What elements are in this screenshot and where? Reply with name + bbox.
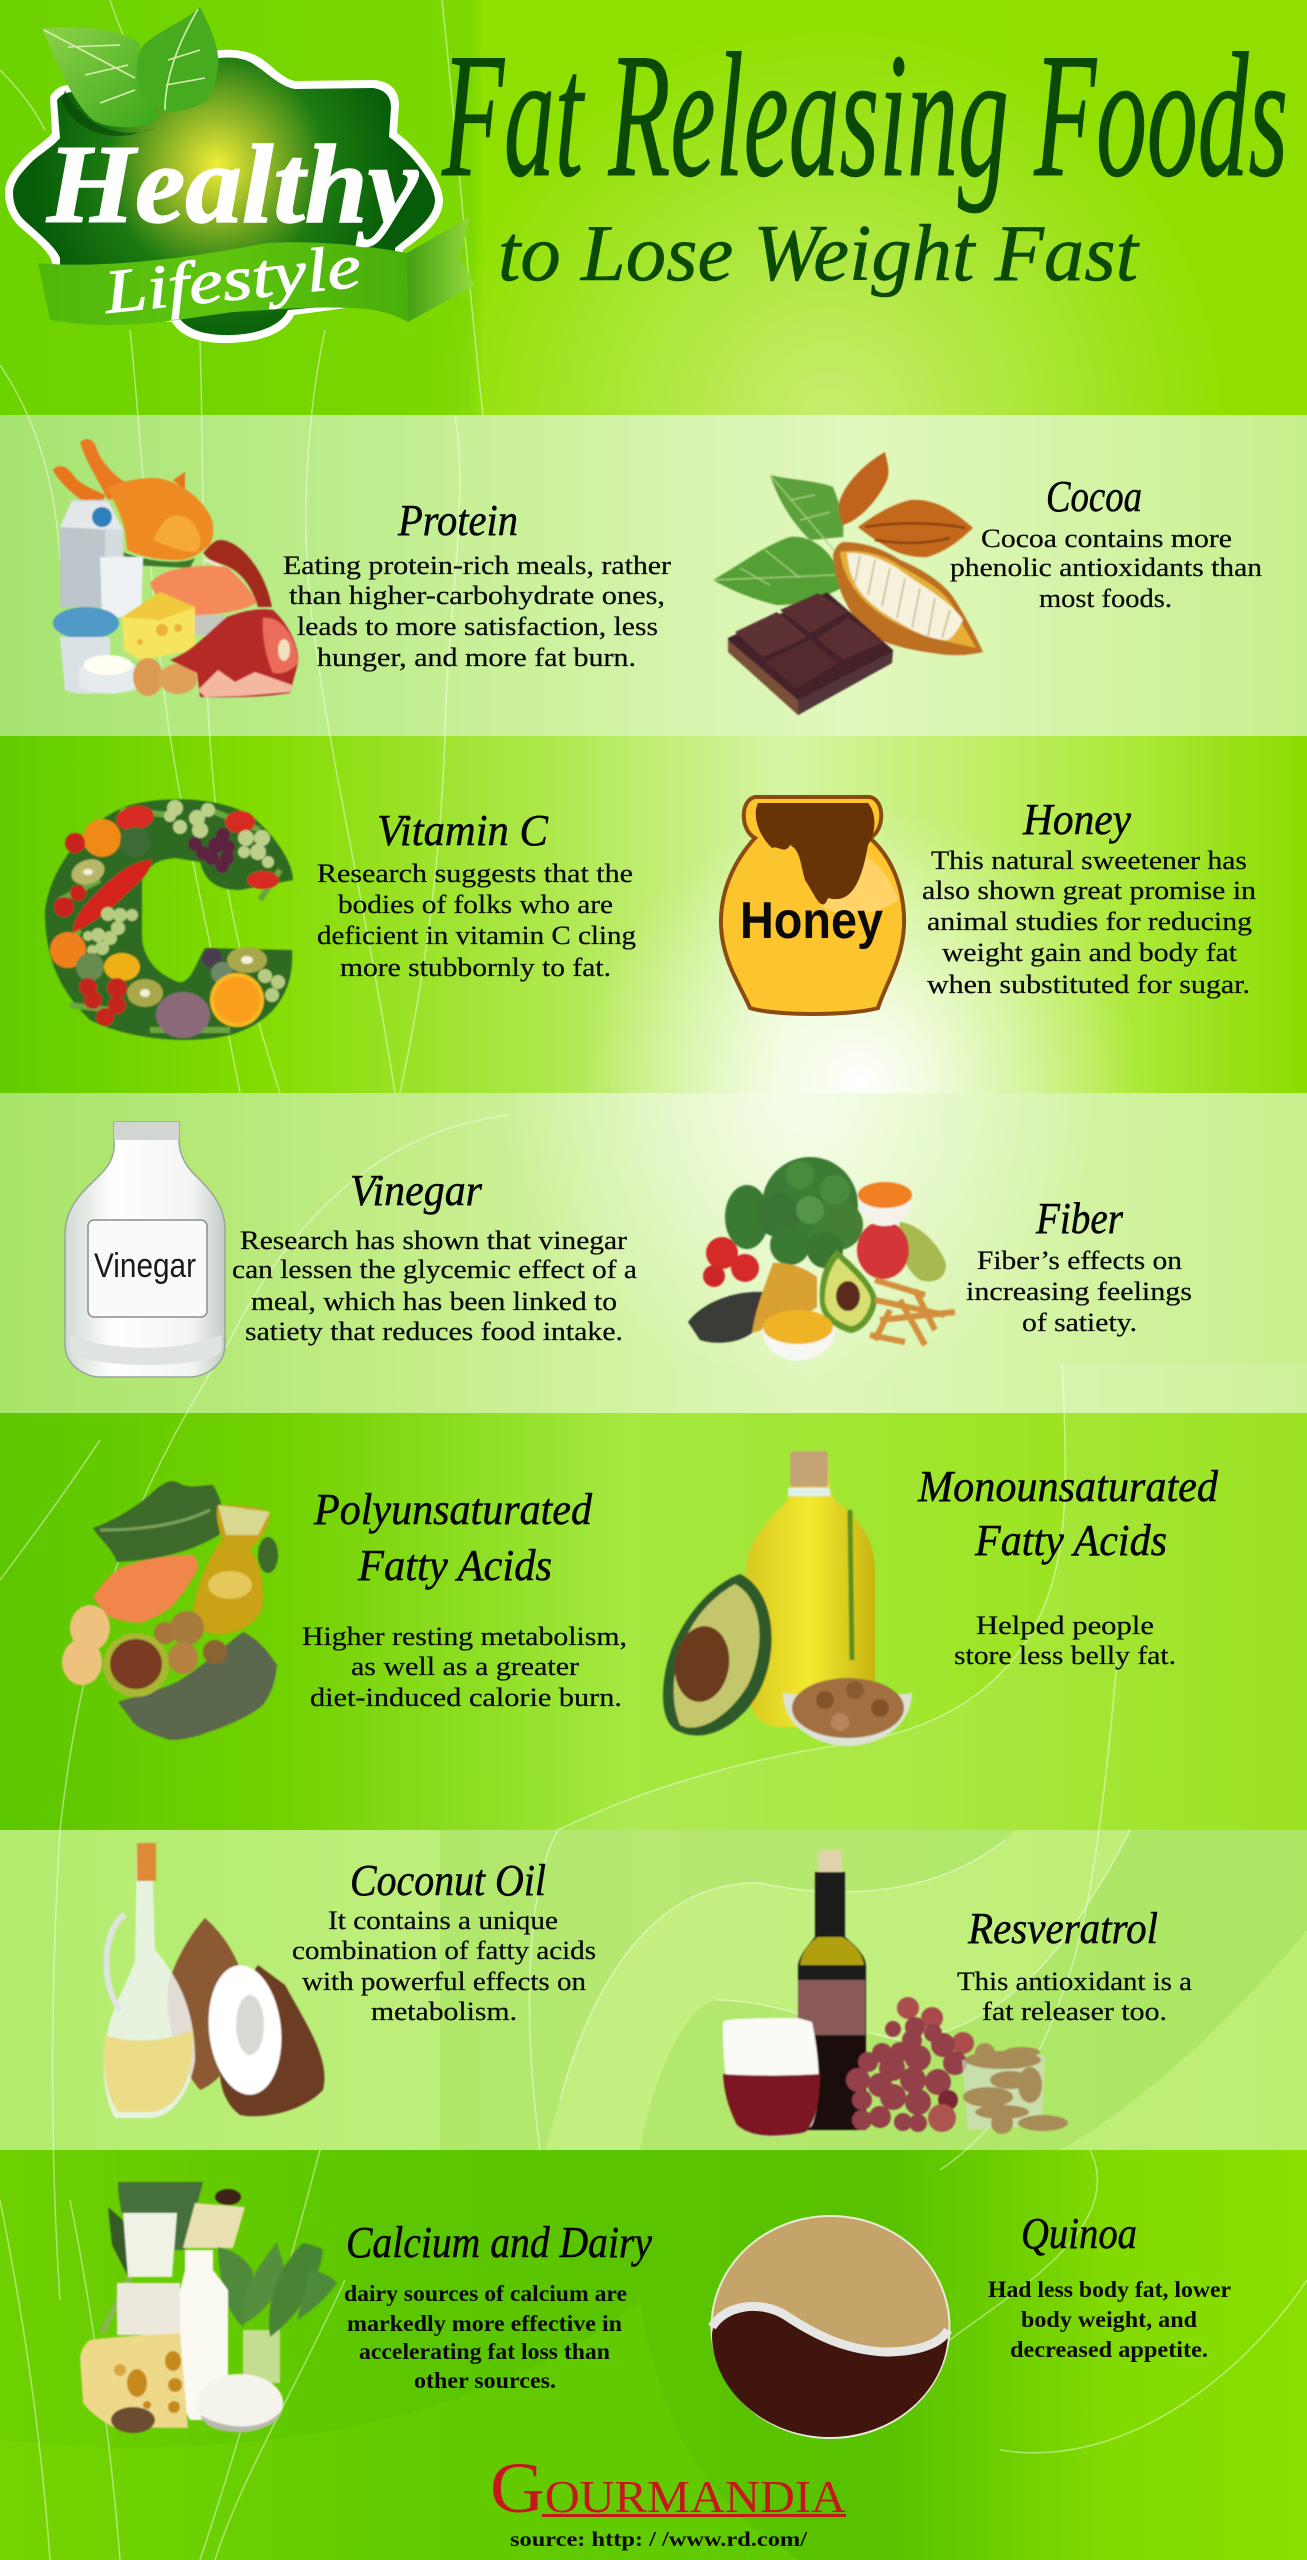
icon: oil bottle and coconut — [104, 1843, 324, 2118]
text block: Fiber’s effects on — [977, 1246, 1182, 1275]
icon: protein foods — [53, 439, 298, 697]
background light swoosh fills — [0, 1364, 1307, 2560]
text block: hunger, and more fat burn. — [317, 643, 636, 672]
text block — [283, 551, 671, 672]
text block — [292, 1906, 596, 2026]
background band 3 — [0, 1093, 1307, 1413]
text block: Research suggests that the — [317, 859, 633, 888]
text block — [954, 1611, 1176, 1670]
brand word: Healthy — [46, 123, 419, 247]
text block: This antioxidant is a — [957, 1967, 1192, 1996]
text block: weight gain and body fat — [942, 938, 1238, 967]
text block — [232, 1226, 638, 1346]
text block: leads to more satisfaction, less — [297, 612, 658, 641]
heading: Quinoa — [1021, 2209, 1137, 2258]
heading: Cocoa — [1046, 472, 1142, 521]
heading line two: Fatty Acids — [357, 1541, 552, 1590]
background band 5 — [0, 1830, 1307, 2150]
footer logo: Gourmandia: GOURMANDIA — [490, 2448, 846, 2528]
icon: quinoa circle — [710, 2215, 950, 2439]
text block: accelerating fat loss than — [359, 2339, 610, 2364]
text block — [922, 846, 1256, 999]
text block: diet-induced calorie burn. — [310, 1683, 622, 1712]
text block: Higher resting metabolism, — [302, 1622, 627, 1651]
icon: cocoa pods and chocolate — [713, 452, 983, 715]
text block: with powerful effects on — [302, 1967, 586, 1996]
background band 4 — [0, 1413, 1307, 1830]
left leaf — [42, 27, 160, 127]
heading: Protein — [397, 496, 518, 545]
heading: Calcium and Dairy — [346, 2218, 652, 2267]
greens texture — [55, 810, 280, 1030]
text block — [302, 1622, 627, 1712]
text block — [966, 1246, 1192, 1337]
title — [441, 16, 1288, 298]
text block: dairy sources of calcium are — [344, 2281, 627, 2306]
text block: bodies of folks who are — [338, 890, 613, 919]
panel: fiber — [688, 1157, 1192, 1361]
text block: Cocoa contains more — [981, 524, 1232, 553]
panel: calcium and dairy — [80, 2182, 652, 2433]
heading: Honey — [1022, 795, 1131, 844]
panel: monounsaturated fatty acids — [663, 1451, 1219, 1746]
heading: Vinegar — [350, 1166, 483, 1215]
leaf shadow — [62, 90, 155, 136]
text block — [957, 1967, 1192, 2026]
badge blob — [5, 50, 443, 343]
icon: honey jar: Honey — [740, 892, 883, 950]
heading: Coconut Oil — [350, 1856, 546, 1905]
brand subword: Lifestyle — [100, 232, 364, 327]
icon: fiber foods — [688, 1157, 955, 1361]
text block: satiety that reduces food intake. — [245, 1317, 623, 1346]
ribbon tail — [405, 217, 475, 322]
text block: combination of fatty acids — [292, 1936, 596, 1965]
text block: Had less body fat, lower — [988, 2277, 1231, 2302]
text block — [317, 859, 636, 982]
icon: wine, grapes and peanuts — [723, 1850, 1068, 2136]
text block: animal studies for reducing — [927, 907, 1252, 936]
text block: most foods. — [1039, 584, 1172, 613]
text block: can lessen the glycemic effect of a — [232, 1255, 638, 1284]
heading: Resveratrol — [967, 1904, 1158, 1953]
icon: dairy foods and greens — [80, 2182, 337, 2433]
panel: polyunsaturated fatty acids — [62, 1481, 627, 1740]
text block: also shown great promise in — [922, 876, 1256, 905]
background header band — [0, 0, 1307, 415]
text block: as well as a greater — [351, 1652, 579, 1681]
text block: body weight, and — [1021, 2307, 1197, 2332]
logo: Healthy Lifestyle badge — [5, 7, 475, 343]
text block: more stubbornly to fat. — [340, 953, 611, 982]
text block: other sources. — [414, 2368, 556, 2393]
icon: vinegar bottle: Vinegar — [94, 1247, 196, 1285]
icon: honey jar — [721, 797, 904, 1014]
text block: increasing feelings — [966, 1277, 1192, 1306]
heading: Vitamin C — [377, 806, 549, 855]
text block: Eating protein-rich meals, rather — [283, 551, 671, 580]
text block: than higher-carbohydrate ones, — [289, 581, 665, 610]
panel: coconut oil — [104, 1843, 596, 2118]
text block: Helped people — [976, 1611, 1154, 1640]
icon: omega-3 foods — [62, 1481, 278, 1740]
source line: source: http: / /www.rd.com/ — [510, 2527, 808, 2551]
heading: Monounsaturated — [917, 1462, 1219, 1511]
icon: letter C of fruit and vegetables — [45, 799, 293, 1040]
text block: when substituted for sugar. — [927, 970, 1250, 999]
panel: vinegar — [65, 1122, 638, 1377]
heading: Polyunsaturated — [313, 1485, 593, 1534]
text block: deficient in vitamin C cling — [317, 921, 636, 950]
text block: meal, which has been linked to — [251, 1287, 617, 1316]
panel: protein — [53, 439, 671, 697]
text block: store less belly fat. — [954, 1641, 1176, 1670]
background band 1 — [0, 415, 1307, 736]
heading line two: Fatty Acids — [974, 1516, 1167, 1565]
panel: resveratrol — [723, 1850, 1192, 2136]
title: to Lose Weight Fast — [498, 210, 1140, 298]
text block: This natural sweetener has — [931, 846, 1247, 875]
panel: honey — [721, 795, 1256, 1014]
text block: phenolic antioxidants than — [950, 553, 1262, 582]
text block: It contains a unique — [328, 1906, 558, 1935]
text block: of satiety. — [1022, 1308, 1137, 1337]
text block: Research has shown that vinegar — [240, 1226, 627, 1255]
text block: decreased appetite. — [1010, 2337, 1208, 2362]
icon: vinegar bottle — [65, 1122, 225, 1377]
icon: olive oil, avocado, almonds — [663, 1451, 912, 1746]
background band 2 — [0, 736, 1307, 1093]
text block — [988, 2277, 1231, 2362]
panel: vitamin C — [45, 799, 636, 1040]
panel: quinoa — [710, 2209, 1231, 2439]
text block: fat releaser too. — [982, 1997, 1167, 2026]
heading: Fiber — [1035, 1194, 1124, 1243]
text block: markedly more effective in — [347, 2311, 622, 2336]
ribbon — [38, 242, 408, 325]
text block: metabolism. — [371, 1997, 517, 2026]
text block — [950, 524, 1262, 613]
right leaf — [137, 7, 218, 112]
background band 6 — [0, 2150, 1307, 2560]
text block — [344, 2281, 627, 2393]
panel: cocoa — [713, 452, 1262, 715]
